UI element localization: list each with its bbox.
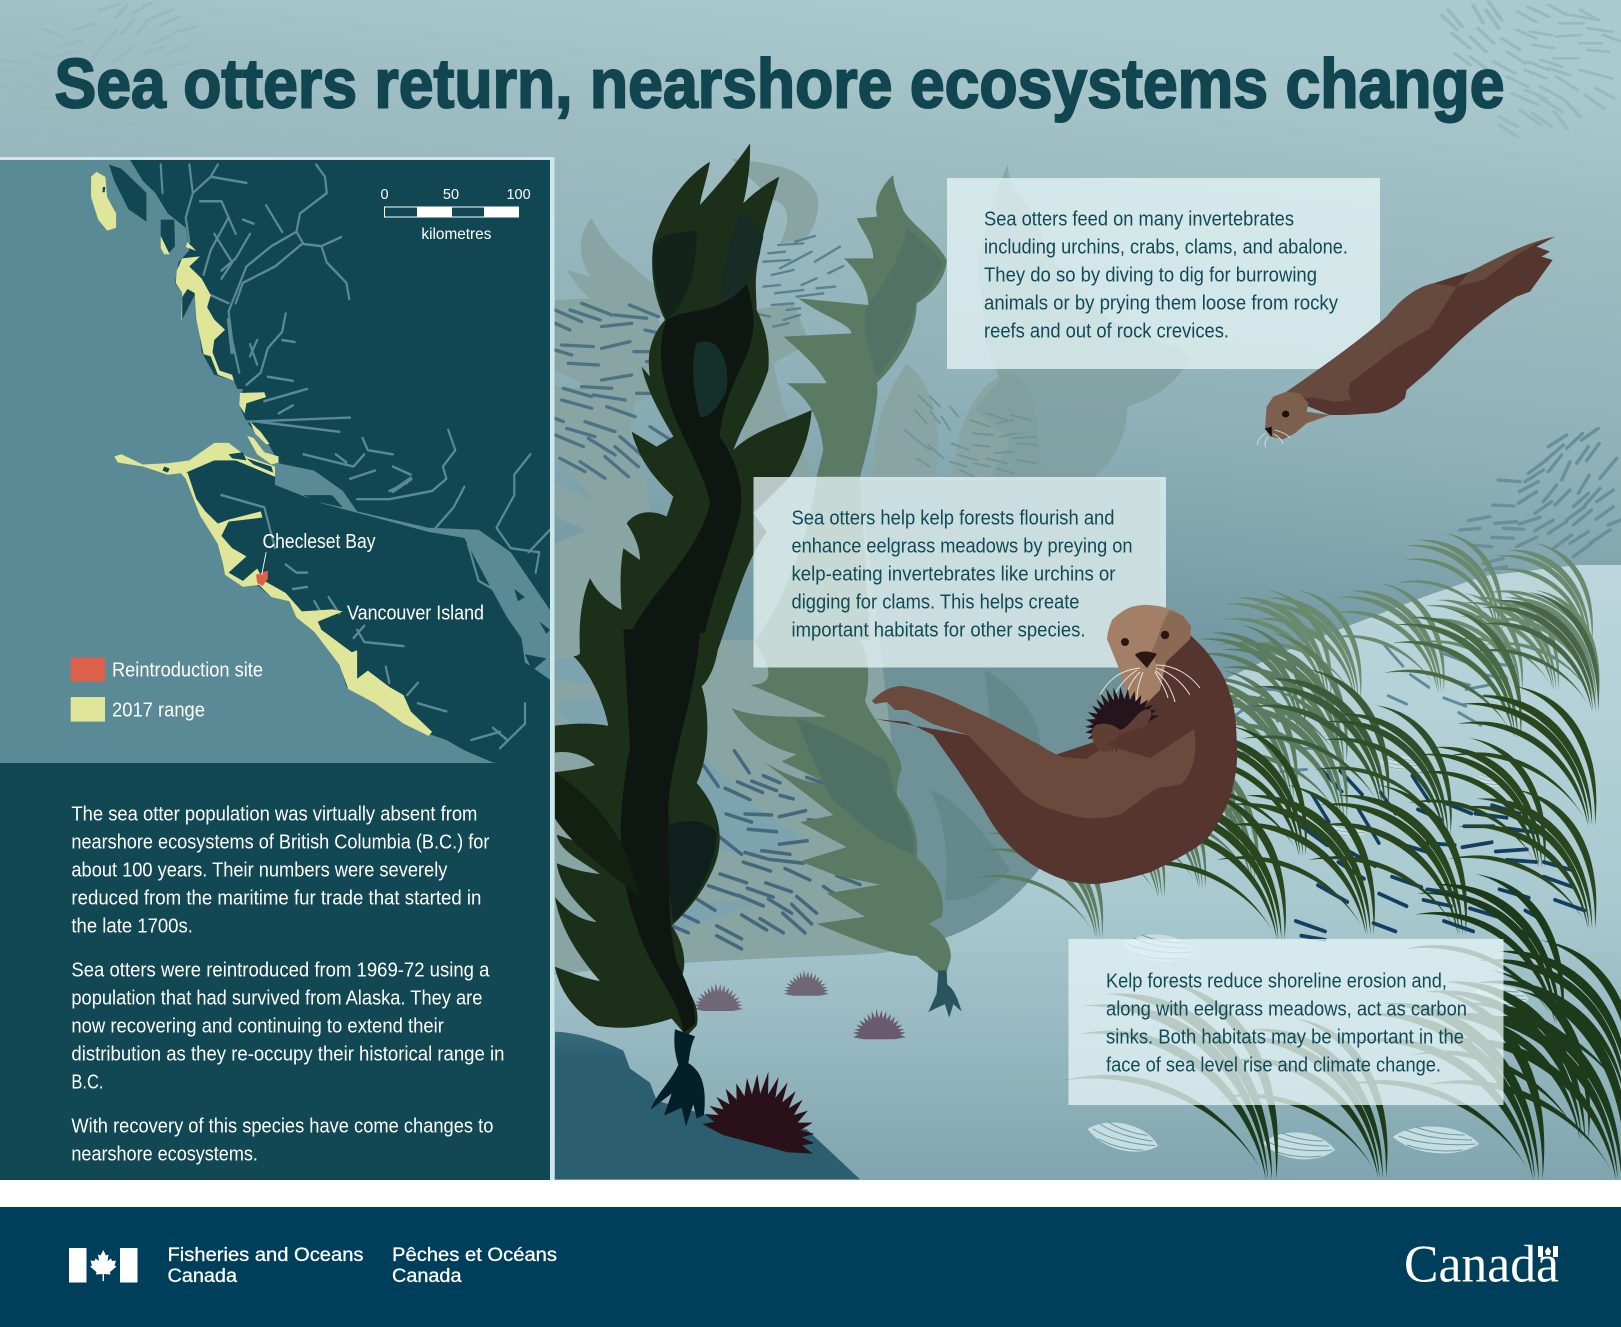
panel: left map and text <box>0 156 561 1180</box>
text box: kelp forests: digging for clams. This helps create <box>792 591 1080 613</box>
otter eye and nose <box>1265 411 1289 437</box>
background kelp: light blades <box>555 158 1190 650</box>
text panel background <box>0 160 550 1180</box>
background kelp: mass behind second box <box>554 480 1160 975</box>
kelp blades upper <box>783 175 947 477</box>
kelp blades lower <box>732 640 951 977</box>
fish school: among eelgrass, navy <box>1296 769 1584 940</box>
reintroduction site <box>256 571 268 586</box>
text block: history: nearshore ecosystems. <box>71 1144 258 1166</box>
text block: history: reduced from the maritime fur trade that started in <box>71 888 481 910</box>
text box: feeding: Sea otters feed on many invertebrates <box>984 209 1294 231</box>
fish school: upper centre <box>755 236 843 327</box>
fish school: left of kelp <box>555 303 677 478</box>
kelp holdfast <box>651 1029 705 1126</box>
map <box>0 156 561 769</box>
otter: diving <box>1257 237 1555 447</box>
text box: kelp forests: Sea otters help kelp forests flourish and <box>792 507 1114 529</box>
map labels: Vancouver Island <box>347 603 484 625</box>
text block: history: Sea otters were reintroduced from 1969-72 using a <box>71 960 490 982</box>
kelp blades behind box <box>756 477 870 640</box>
department names: Canada <box>168 1265 237 1287</box>
sea urchins: background <box>694 970 906 1039</box>
department names: Canada <box>392 1265 462 1287</box>
legend: Reintroduction site <box>112 660 263 682</box>
scale bar: 50 <box>443 187 459 203</box>
eelgrass: front row <box>1066 874 1621 1180</box>
text box: kelp forests: important habitats for other species. <box>792 619 1086 641</box>
otter back light <box>1287 283 1457 402</box>
map labels <box>262 531 484 625</box>
fish school: among eelgrass, pale <box>1236 645 1514 771</box>
text box: feeding: animals or by prying them loose from rocky <box>984 293 1339 315</box>
footer white band <box>0 1180 1621 1207</box>
kelp upper blades <box>580 143 812 655</box>
kelp blades upper shading <box>865 227 943 377</box>
2017 range <box>91 172 432 736</box>
text box: feeding: including urchins, crabs, clams, and abalone. <box>984 237 1348 259</box>
icon: Canadian flag signature <box>69 1248 138 1282</box>
leader line <box>262 552 266 575</box>
scale bar: 100 <box>506 187 531 203</box>
footer <box>0 1207 1621 1327</box>
department names: Pêches et Océans <box>392 1244 557 1266</box>
range holes <box>102 187 273 473</box>
scale bar: 0 <box>381 187 389 203</box>
text block: history: population that had survived from Alaska. They are <box>71 988 482 1010</box>
legend <box>71 658 263 722</box>
eelgrass: fourth row <box>1127 686 1596 940</box>
eelgrass: back row <box>1215 533 1600 700</box>
otter whiskers <box>1100 665 1200 708</box>
otter tail highlight <box>1457 237 1555 287</box>
otter flipper and belly light <box>872 686 1195 818</box>
islands <box>109 164 175 254</box>
text box: kelp forests: kelp-eating invertebrates like urchins or <box>792 563 1116 585</box>
text block: history <box>71 804 504 1166</box>
map labels: Checleset Bay <box>262 531 376 553</box>
fish school: top left <box>0 3 196 155</box>
otter body dark <box>875 635 1237 884</box>
fish school: lower centre <box>672 751 860 949</box>
text box: carbon sinks: Kelp forests reduce shoreline erosion and, <box>1106 970 1447 992</box>
text box: feeding <box>947 178 1380 369</box>
text block: history: nearshore ecosystems of British Columbia (B.C.) for <box>71 832 490 854</box>
land <box>130 156 557 769</box>
department names: Fisheries and Oceans <box>168 1244 364 1266</box>
text box: carbon sinks: along with eelgrass meadows, act as carbon <box>1106 998 1467 1020</box>
sea urchin held <box>1074 675 1160 755</box>
text block: history: B.C. <box>71 1072 103 1094</box>
inlets <box>161 164 550 748</box>
clams <box>1085 756 1529 1159</box>
sound detail <box>229 320 411 491</box>
otter body dark <box>1287 237 1555 415</box>
mid kelp over seabed <box>817 917 951 977</box>
text block: history: distribution as they re-occupy their historical range in <box>71 1044 504 1066</box>
Canada wordmark: Canada <box>1404 1236 1559 1294</box>
otter eyes and nose <box>1121 631 1169 668</box>
holdfast <box>928 977 962 1018</box>
otter paw <box>1092 709 1151 752</box>
text box: kelp forests: enhance eelgrass meadows by preying on <box>792 535 1132 557</box>
text block: history: now recovering and continuing to extend their <box>71 1016 444 1038</box>
scale bar <box>381 187 531 243</box>
text box: carbon sinks: face of sea level rise and climate change. <box>1106 1054 1441 1076</box>
eelgrass: third row <box>1241 592 1599 835</box>
otter arm <box>1107 690 1194 758</box>
foreground kelp <box>555 143 812 1126</box>
text box: feeding: They do so by diving to dig for burrowing <box>984 265 1317 287</box>
mid-ground kelp <box>732 175 962 1018</box>
scale bar: kilometres <box>421 226 491 243</box>
text block: history: The sea otter population was virtually absent from <box>71 804 477 826</box>
text block: history: With recovery of this species have come changes to <box>71 1116 493 1138</box>
seabed <box>554 565 1621 1180</box>
sea urchin: foreground <box>701 1059 830 1159</box>
strait <box>275 462 561 687</box>
fish school: kelp right <box>905 395 1037 477</box>
text box: kelp forests <box>754 477 1166 668</box>
otter head <box>1107 605 1191 710</box>
eelgrass meadow <box>976 533 1621 1180</box>
text box: carbon sinks: sinks. Both habitats may be important in the <box>1106 1026 1464 1048</box>
text block: history: the late 1700s. <box>71 916 193 938</box>
kelp lower blades <box>555 629 720 1036</box>
map sea <box>0 160 550 763</box>
fish school: top right <box>1441 2 1621 137</box>
rock <box>555 1032 860 1179</box>
panel frame <box>0 157 554 1180</box>
text block: history: about 100 years. Their numbers were severely <box>71 860 448 882</box>
eelgrass: second row <box>976 625 1348 938</box>
text box: carbon sinks <box>1068 939 1504 1105</box>
otter head <box>1265 392 1330 439</box>
strait islands <box>304 495 550 671</box>
kelp blades lower shading <box>797 719 914 854</box>
holdfast over seabed <box>928 970 962 1018</box>
legend: 2017 range <box>112 700 205 722</box>
otter whiskers <box>1257 430 1290 447</box>
department names <box>168 1244 557 1287</box>
text box: feeding: reefs and out of rock crevices. <box>984 321 1229 343</box>
otter head shading <box>1152 610 1191 672</box>
fish school: right middle <box>1459 428 1621 570</box>
otter: floating with urchin <box>872 605 1237 884</box>
